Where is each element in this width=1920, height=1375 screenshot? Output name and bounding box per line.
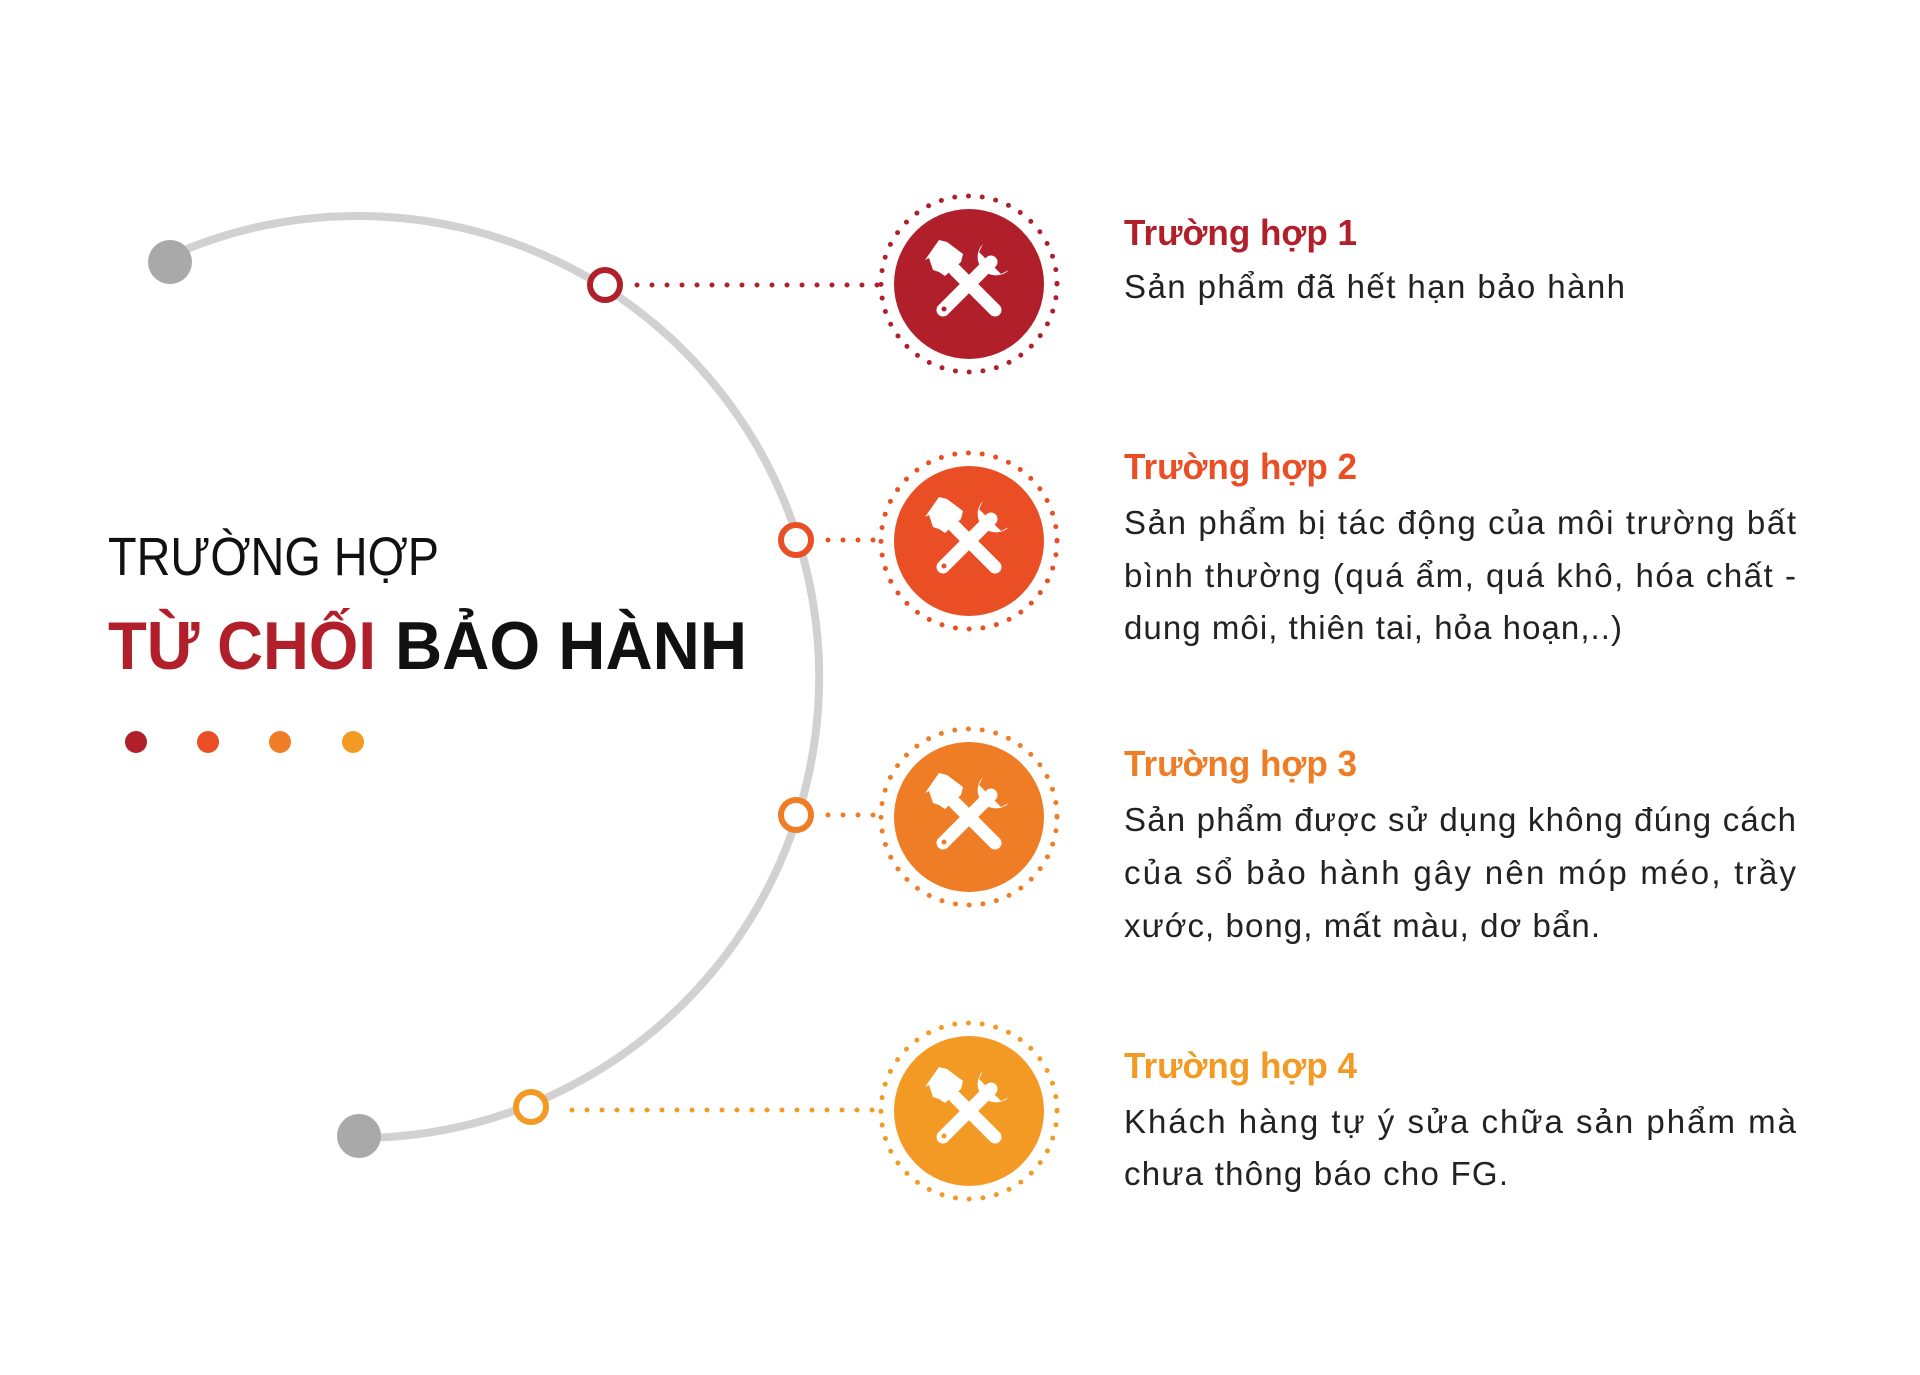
icon 1 <box>881 196 1057 372</box>
case 1 <box>590 196 1625 372</box>
title: TRƯỜNG HỢP <box>108 527 439 587</box>
icon 2 <box>881 453 1057 629</box>
connector 2 <box>828 538 878 542</box>
text 2: bình thường (quá ẩm, quá khô, hóa chất - <box>1124 557 1796 594</box>
text 1: Sản phẩm đã hết hạn bảo hành <box>1124 268 1625 305</box>
color dots <box>125 731 364 753</box>
title <box>108 527 747 684</box>
connector 4 <box>572 1108 878 1112</box>
icon 3 <box>881 729 1057 905</box>
text 2 <box>1124 446 1796 646</box>
icon 4 <box>881 1023 1057 1199</box>
connector 1 <box>637 282 878 288</box>
arc end dot top <box>148 240 192 284</box>
text 3: Trường hợp 3 <box>1124 743 1357 784</box>
case 2 <box>781 446 1796 646</box>
text 3 <box>1124 743 1796 944</box>
arc end dot bottom <box>337 1114 381 1158</box>
text 2: dung môi, thiên tai, hỏa hoạn,..) <box>1124 609 1622 646</box>
text 3: xước, bong, mất màu, dơ bẩn. <box>1124 907 1600 944</box>
connector 3 <box>828 812 878 818</box>
text 1 <box>1124 212 1625 305</box>
text 4 <box>1124 1045 1797 1192</box>
text 4: Khách hàng tự ý sửa chữa sản phẩm mà <box>1124 1103 1797 1140</box>
text 2: Trường hợp 2 <box>1124 446 1357 487</box>
text 3: Sản phẩm được sử dụng không đúng cách <box>1124 801 1796 838</box>
title: BẢO HÀNH <box>395 607 747 684</box>
text 3: của sổ bảo hành gây nên móp méo, trầy <box>1124 854 1796 891</box>
case 3 <box>781 729 1796 944</box>
text 4: chưa thông báo cho FG. <box>1124 1155 1508 1192</box>
text 2: Sản phẩm bị tác động của môi trường bất <box>1124 504 1796 541</box>
text 1: Trường hợp 1 <box>1124 212 1357 253</box>
arc timeline <box>148 216 819 1158</box>
title: TỪ CHỐI <box>108 607 376 684</box>
text 4: Trường hợp 4 <box>1124 1045 1357 1086</box>
case 4 <box>516 1023 1797 1199</box>
